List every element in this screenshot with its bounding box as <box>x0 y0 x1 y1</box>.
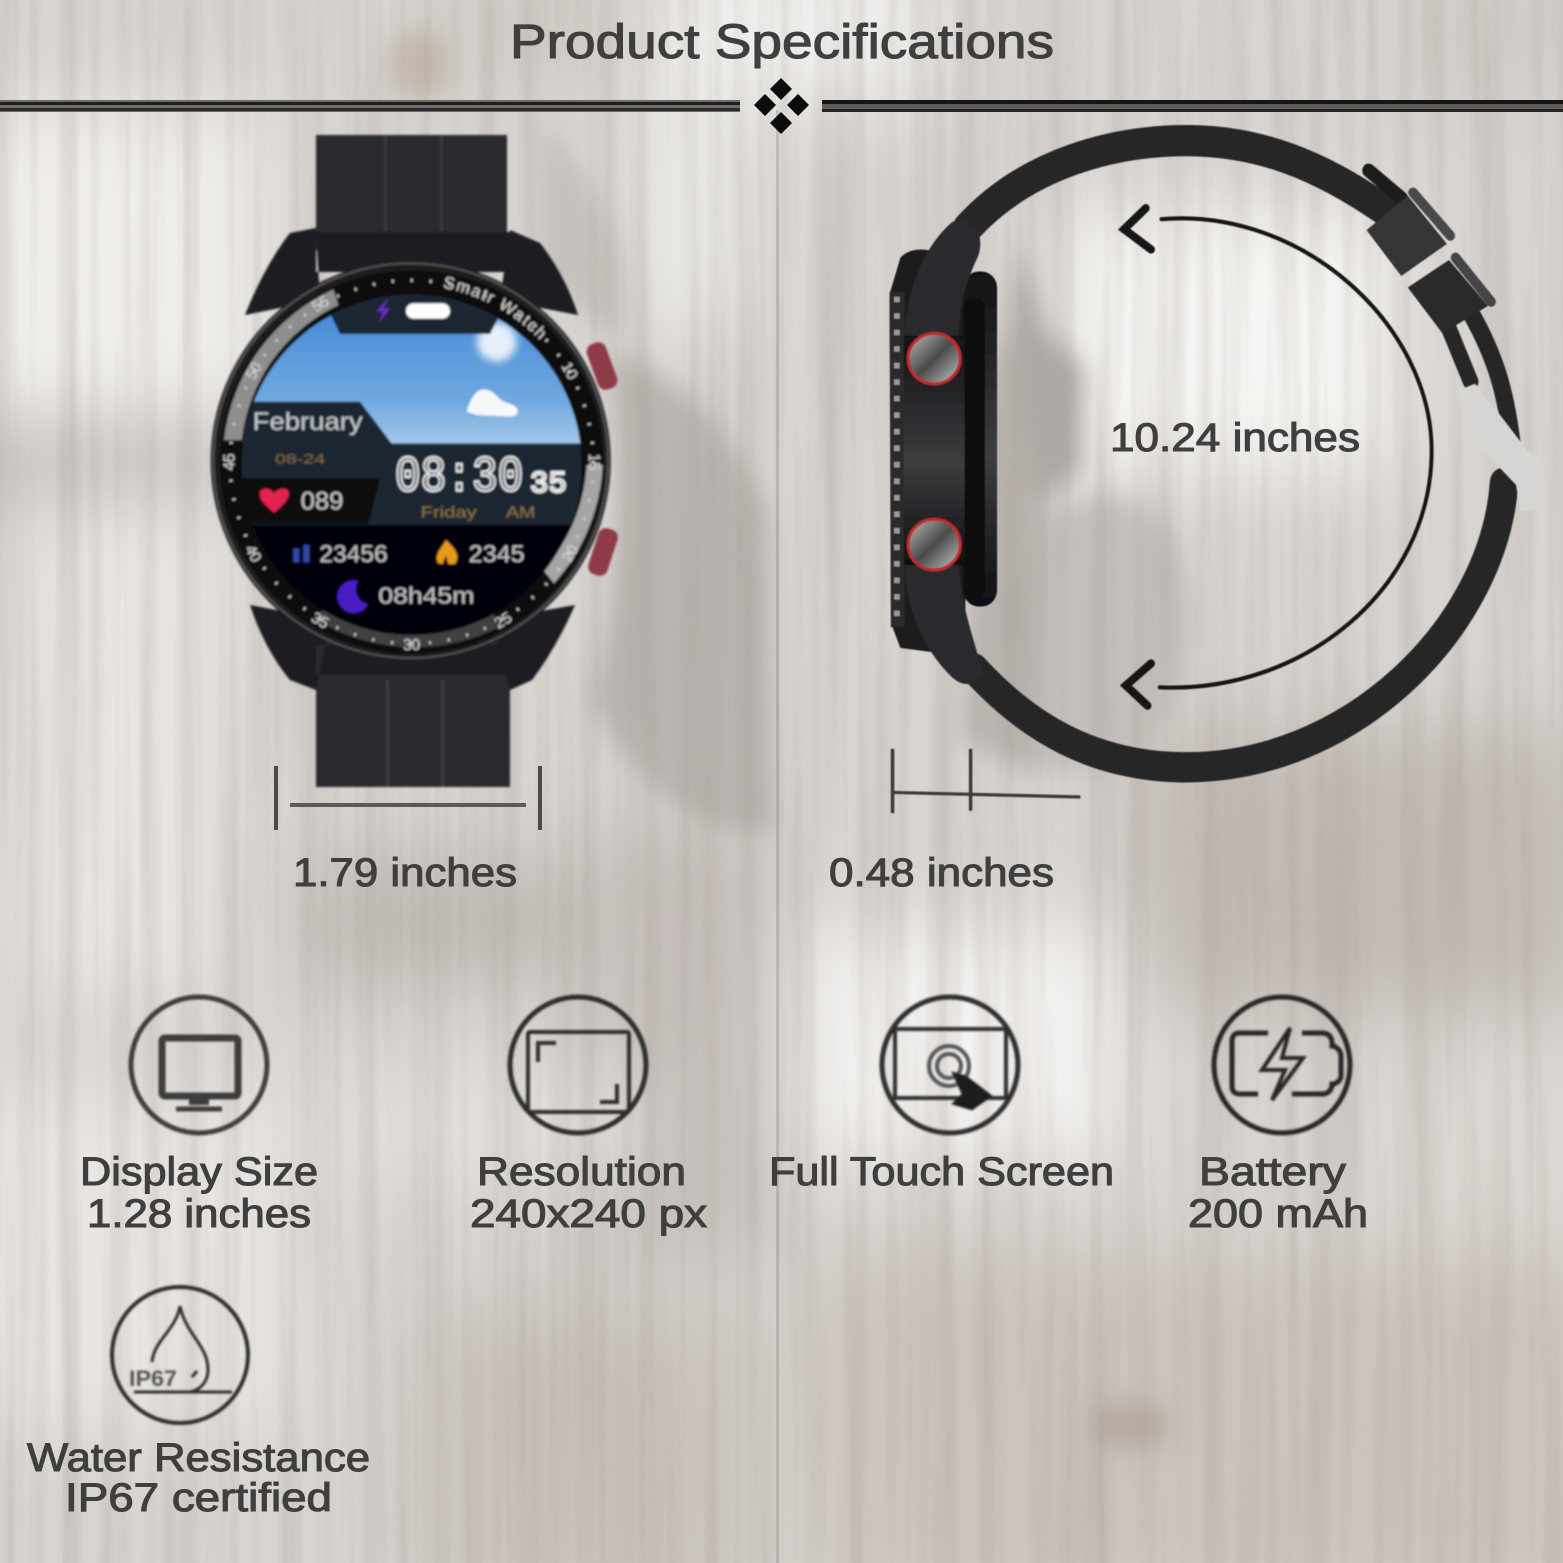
spec: display size <box>80 1150 318 1236</box>
sky <box>240 293 590 445</box>
title: Product Specifications <box>510 16 1054 69</box>
thickness marker <box>893 749 1080 813</box>
spec: full touch screen: Full Touch Screen <box>769 1150 1114 1194</box>
top notch <box>329 292 500 336</box>
screen: 089 <box>301 488 343 515</box>
bezel numerals: 40 <box>241 542 264 565</box>
bezel numerals <box>221 272 602 654</box>
steps and calories <box>293 545 309 562</box>
screen <box>240 293 584 636</box>
top strap <box>316 135 507 250</box>
bezel numerals: 30 <box>403 637 420 654</box>
bezel numerals: 35 <box>308 609 332 633</box>
screen: 08h45m <box>378 582 474 608</box>
watch side view <box>890 141 1540 813</box>
bezel numerals: Smatr Watch <box>442 274 547 342</box>
side buttons <box>908 333 960 570</box>
screen: Friday <box>421 505 477 522</box>
watch body <box>890 221 997 684</box>
bezel numerals: 45 <box>221 453 238 471</box>
screen: February <box>253 409 363 436</box>
spec: display size: Display Size <box>80 1150 318 1194</box>
strap loops <box>1367 193 1491 333</box>
silver clasp <box>1455 384 1540 510</box>
screen: AM <box>506 505 535 522</box>
strap ring <box>968 141 1513 767</box>
spec: battery: 200 mAh <box>1188 1192 1368 1236</box>
spec: water resistance: IP67 certified <box>65 1476 332 1520</box>
spec: water resistance <box>27 1436 370 1520</box>
screen: 2345 <box>469 541 525 568</box>
date and time panel <box>233 402 597 525</box>
digital time: 08:30 <box>395 450 523 507</box>
spec: resolution: Resolution <box>477 1150 686 1194</box>
icon: water resistance <box>112 1287 248 1423</box>
bezel <box>211 261 611 661</box>
digital time: 35 <box>530 467 567 502</box>
circumference arrow <box>1124 208 1432 706</box>
spec: resolution: 240x240 px <box>470 1192 707 1236</box>
bezel numerals: 55 <box>309 293 332 316</box>
bottom strap <box>316 640 510 787</box>
heart rate row <box>233 478 380 524</box>
bezel numerals: 25 <box>492 609 515 633</box>
red side buttons <box>584 340 620 578</box>
icon: water resistance: IP67 <box>129 1366 177 1391</box>
spec: resolution <box>470 1150 707 1236</box>
digital time <box>394 454 568 496</box>
watch front view <box>209 133 620 789</box>
spec: battery: Battery <box>1199 1150 1346 1194</box>
spec: display size: 1.28 inches <box>87 1192 311 1236</box>
icon: display size <box>131 997 267 1133</box>
icon: full touch screen <box>882 997 1018 1133</box>
width dimension marker <box>276 766 540 830</box>
screen: 23456 <box>319 541 388 568</box>
spec: water resistance: Water Resistance <box>27 1436 370 1480</box>
bezel numerals: 50 <box>243 359 266 383</box>
sleep <box>338 581 367 612</box>
header divider with ornament <box>0 78 1563 134</box>
icon: battery <box>1214 997 1350 1133</box>
spec: battery <box>1188 1150 1368 1236</box>
screen: 08-24 <box>275 450 325 466</box>
label: 1.79 inches: 1.79 inches <box>293 851 517 895</box>
bezel numerals: 15 <box>585 453 602 471</box>
bezel numerals: 20 <box>559 542 582 565</box>
bezel numerals: 10 <box>558 359 581 383</box>
label: 10.24 inches: 10.24 inches <box>1110 416 1360 460</box>
lugs <box>245 228 578 690</box>
icon: resolution <box>510 997 646 1133</box>
label: 0.48 inches: 0.48 inches <box>829 851 1054 895</box>
